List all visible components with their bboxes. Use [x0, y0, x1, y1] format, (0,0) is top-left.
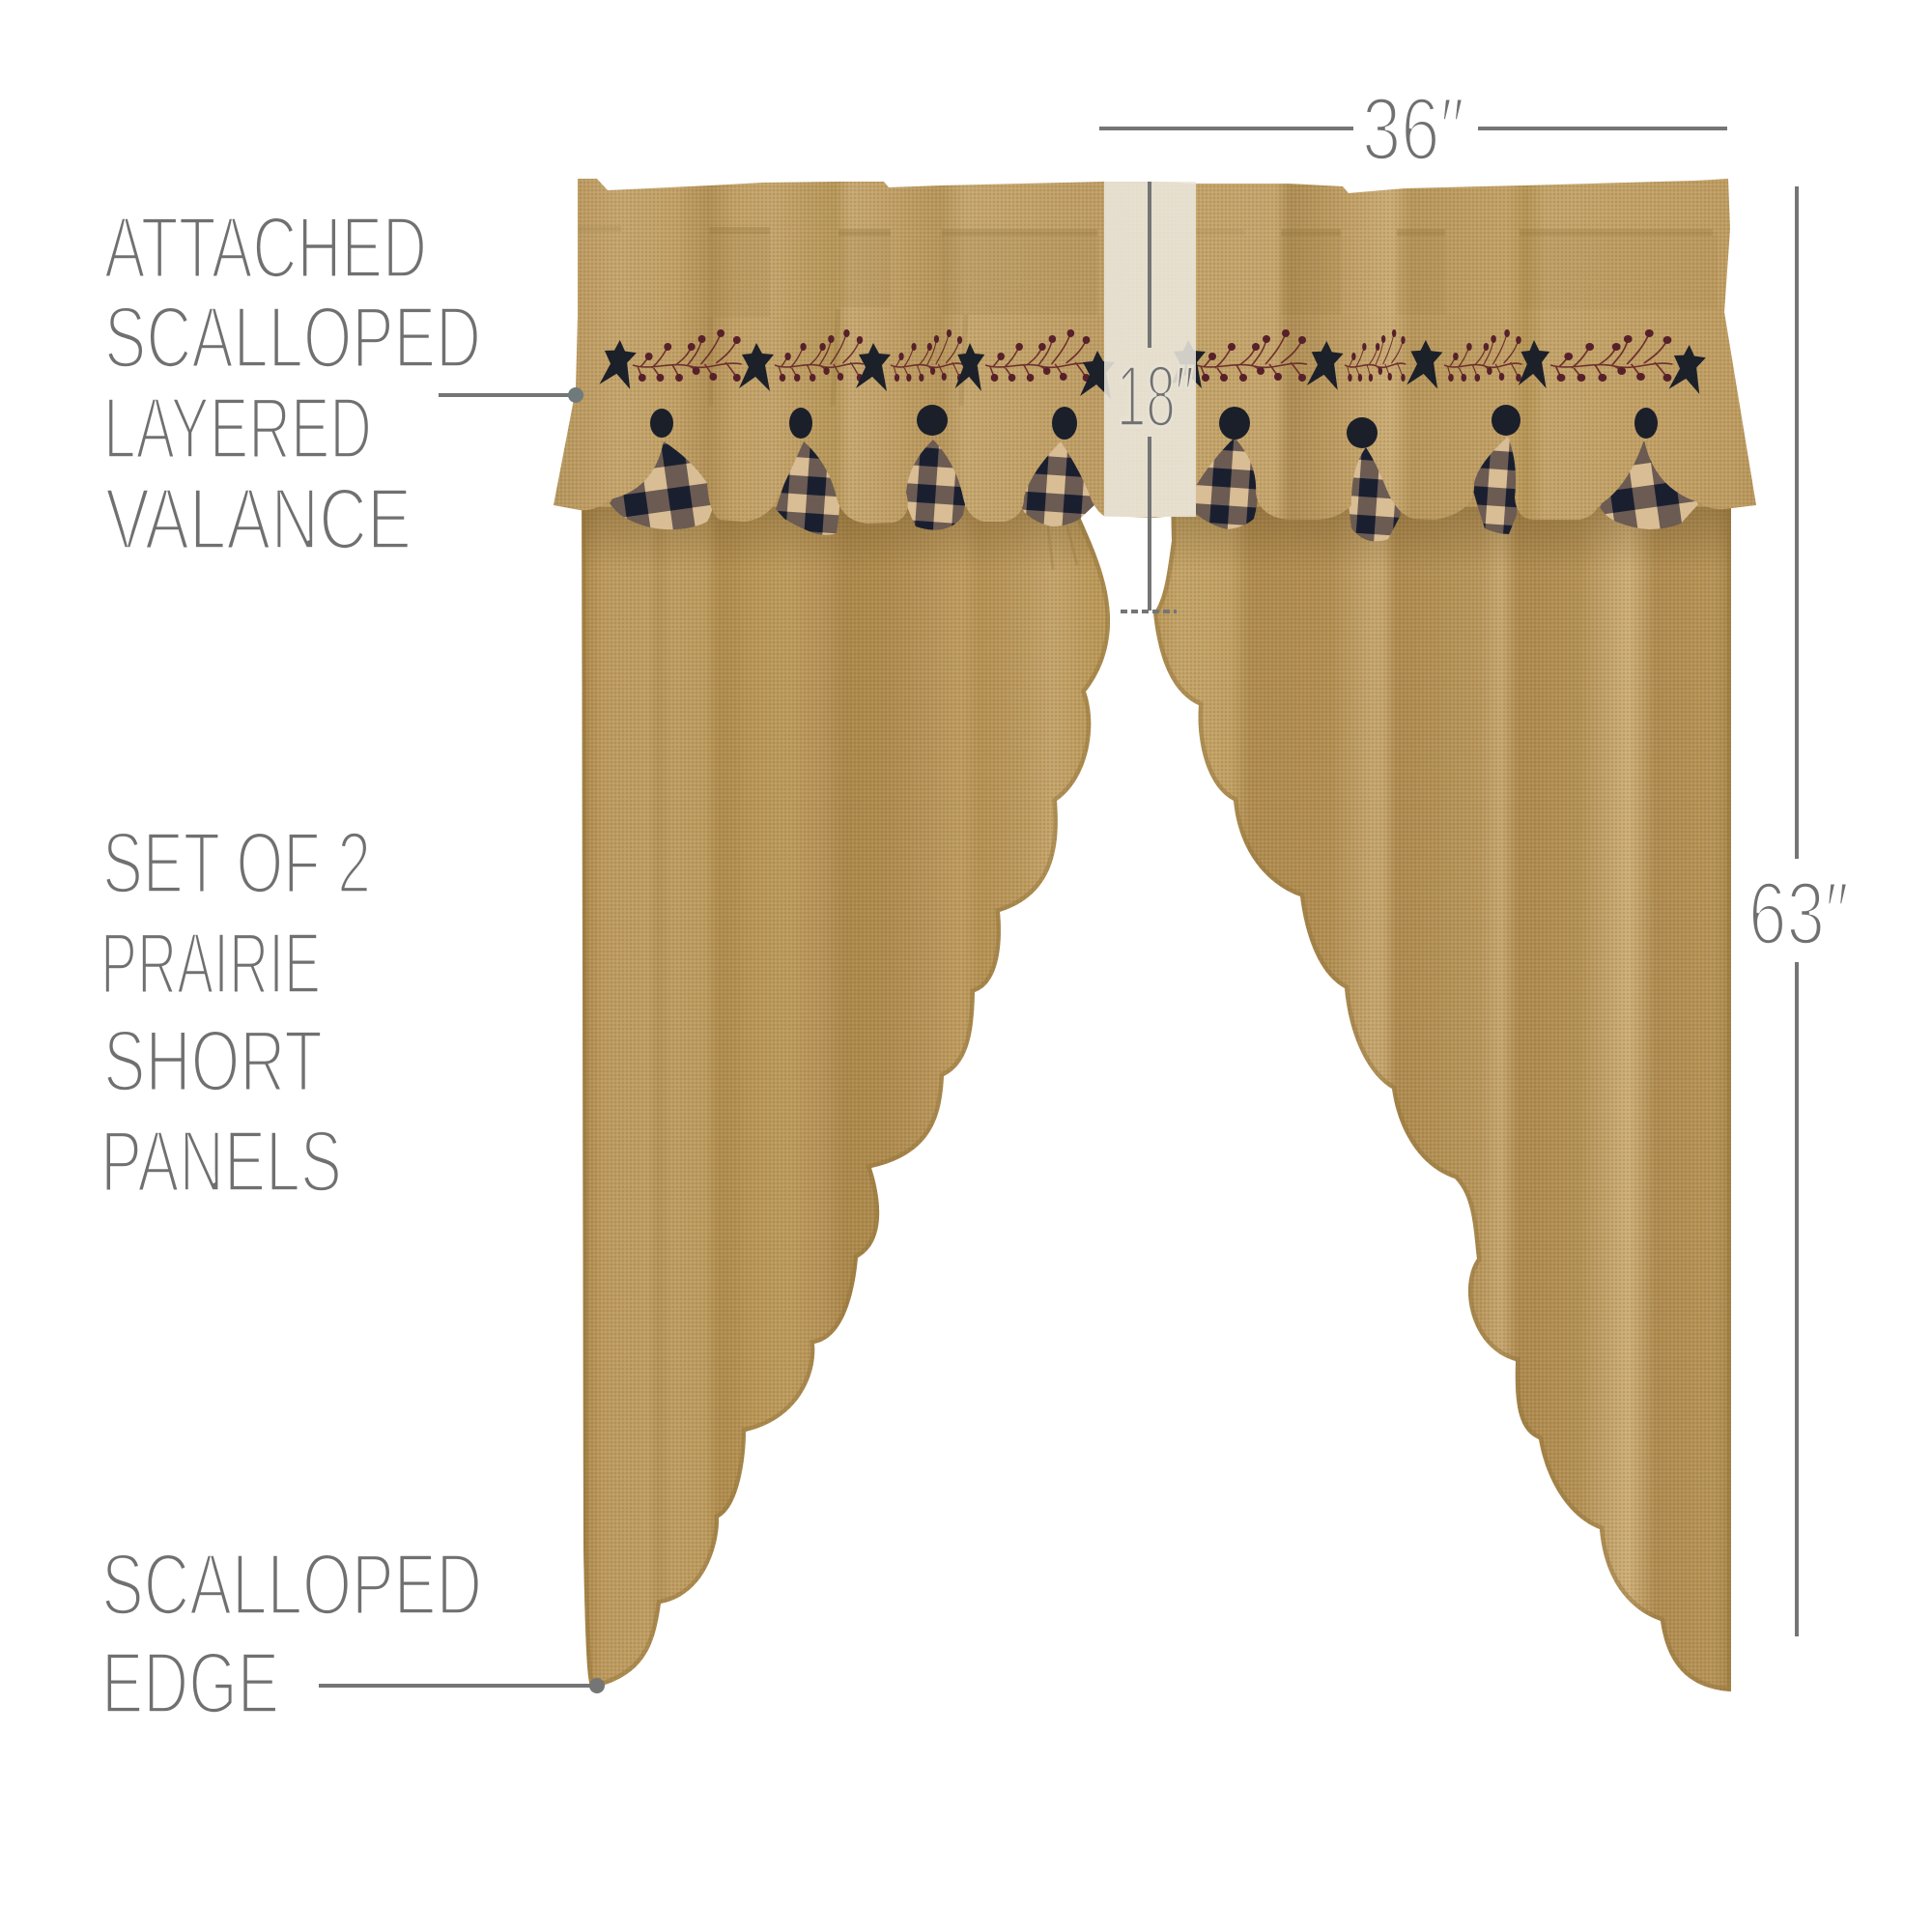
dimension: 63 inch length: 63″ — [1748, 865, 1849, 963]
label: scalloped edge: EDGE — [101, 1635, 279, 1732]
label: attached scalloped layered valance: SCALLOPED — [104, 290, 481, 386]
label: attached scalloped layered valance: LAYERED — [103, 381, 372, 477]
checked fabric drops — [610, 425, 1698, 541]
right curtain panel — [1150, 406, 1739, 1691]
fabric buttons — [650, 405, 1658, 448]
label: scalloped edge: SCALLOPED — [101, 1537, 482, 1634]
label: attached scalloped layered valance: ATTACHED — [104, 200, 427, 297]
label: attached scalloped layered valance: VALANCE — [105, 471, 412, 568]
left curtain panel — [582, 483, 1110, 1685]
label: attached scalloped layered valance — [103, 200, 481, 568]
label: scalloped edge — [101, 1537, 482, 1732]
dimension: 36 inch width: 36″ — [1362, 80, 1464, 179]
callout leader: valance — [439, 387, 583, 403]
label: set of 2 prairie short panels: SET OF 2 — [102, 815, 371, 912]
callout leader: scalloped edge — [319, 1678, 605, 1693]
label: set of 2 prairie short panels — [100, 815, 371, 1210]
embroidered berry vines — [633, 329, 1673, 382]
valance: left half — [554, 179, 1154, 524]
center cream overlay band — [1104, 182, 1196, 517]
valance: right half — [1154, 179, 1756, 520]
dimension: 18 inch drop: 18″ — [1117, 349, 1194, 445]
black stars — [599, 339, 1707, 399]
label: set of 2 prairie short panels: SHORT — [103, 1013, 323, 1110]
label: set of 2 prairie short panels: PANELS — [100, 1114, 342, 1210]
label: set of 2 prairie short panels: PRAIRIE — [100, 916, 321, 1012]
